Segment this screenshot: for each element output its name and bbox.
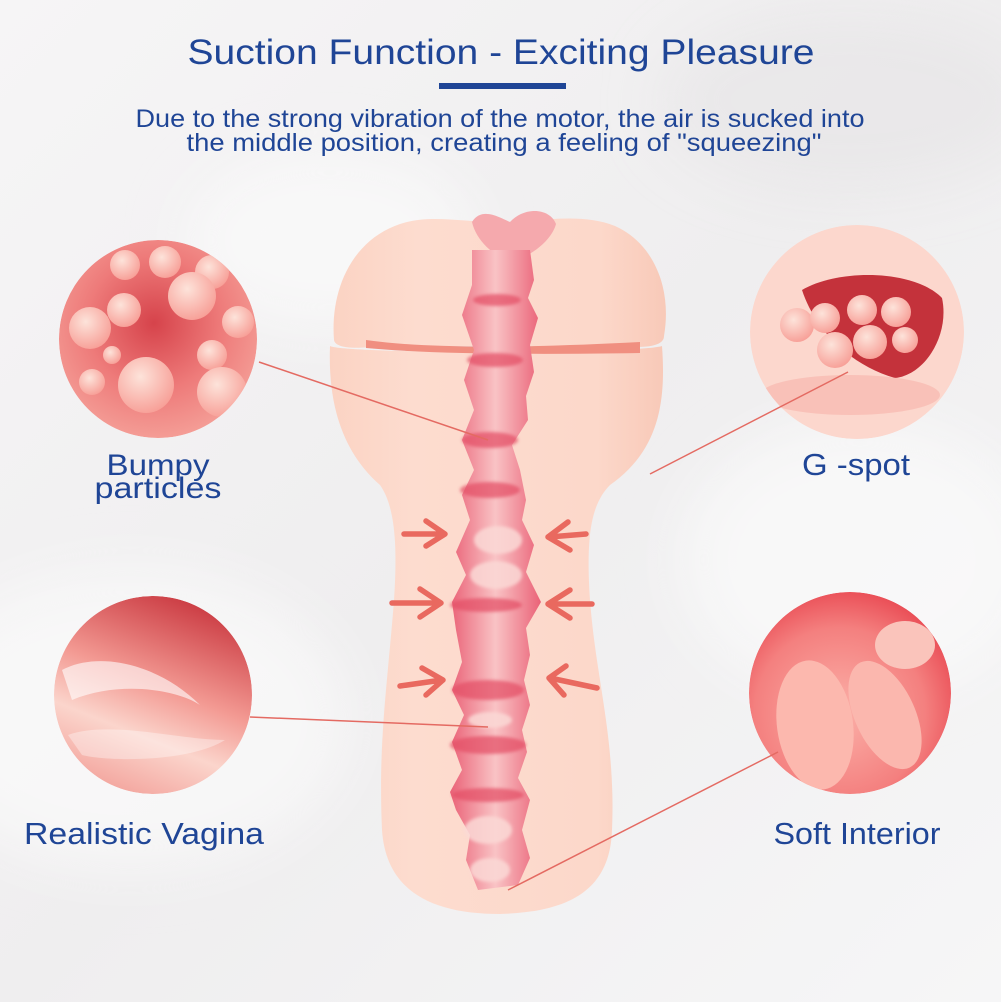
arrows: squeezing direction [392,521,597,695]
title underline [439,83,566,89]
arrow left 2 [392,589,441,617]
inner channel [450,250,541,890]
callout: soft interior [508,592,951,890]
title: Suction Function - Exciting Pleasure [188,32,814,72]
detail circle: folds [54,596,252,794]
callout: realistic vagina [24,596,488,851]
detail circle: bumps [750,225,964,439]
cap seam [366,340,640,354]
arrow left 3 [400,668,443,695]
leader line [250,717,488,727]
detail circle: bumps [59,240,257,438]
detail circle: soft folds [749,592,951,795]
arrow right 3 [549,666,597,695]
arrow right 1 [548,522,586,550]
label [94,449,222,505]
lower sleeve [330,346,663,914]
subtitle: Due to the strong vibration of the motor, the air is sucked into [136,105,864,133]
label: Soft Interior [774,817,940,851]
subtitle [136,105,864,157]
label: particles [94,472,222,505]
leader line [650,372,848,474]
callout: g-spot [650,225,964,482]
label: G -spot [802,448,911,482]
upper cap [334,219,666,348]
top fold [472,211,556,260]
arrow left 1 [404,521,445,546]
subtitle: the middle position, creating a feeling of "squeezing" [186,129,822,157]
arrow right 2 [548,590,592,618]
leader line [259,362,488,440]
label: Bumpy [106,449,210,482]
callout: bumpy particles [59,240,488,505]
label: Realistic Vagina [24,817,264,851]
product body [330,211,666,914]
leader line [508,752,778,890]
